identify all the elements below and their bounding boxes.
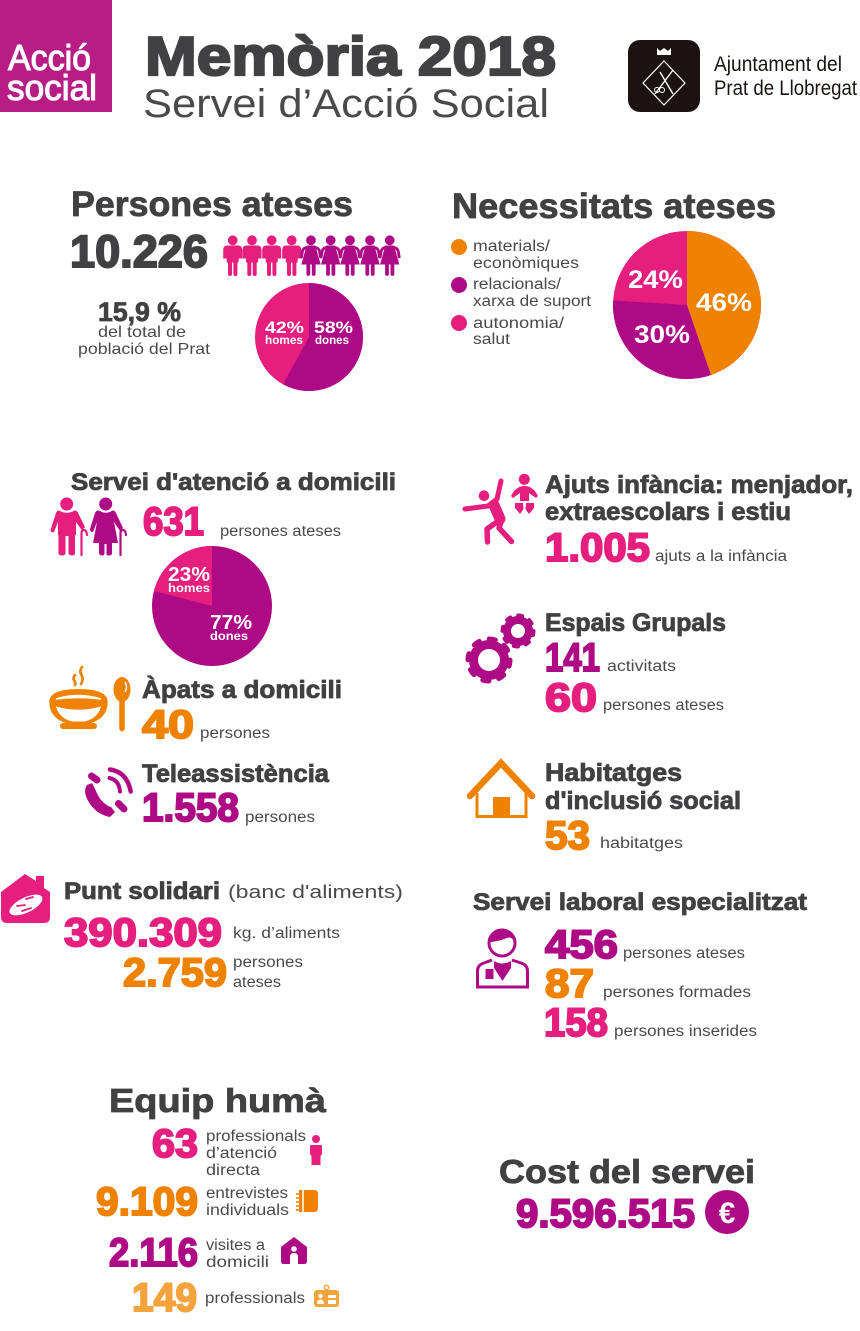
- label: persones: persones: [200, 725, 270, 742]
- icon: euro coin: €: [719, 1197, 736, 1230]
- pie chart: necessitats: 30%: [634, 321, 690, 349]
- icon: person: [310, 1135, 322, 1165]
- pie chart: necessitats: [613, 231, 761, 379]
- legend: salut: [473, 331, 511, 348]
- number: 87: 87: [545, 962, 594, 1006]
- label: visites a domicili: [206, 1237, 269, 1271]
- pie chart: necessitats: 46%: [696, 289, 752, 317]
- label: persones ateses: [233, 954, 303, 991]
- legend: autonomia/: [473, 315, 565, 332]
- label: persones ateses: ateses: [233, 974, 281, 991]
- label: professionals d'atenció directa: [206, 1128, 306, 1179]
- panel: persones ateses: [70, 185, 399, 391]
- heading: Servei laboral especialitzat: [473, 889, 807, 916]
- icon: elderly couple: [50, 498, 126, 556]
- number: 63: 63: [152, 1122, 198, 1166]
- icon: row of people: [224, 236, 399, 274]
- label: persones ateses: persones ateses: [220, 523, 341, 540]
- icon: house with bread: [1, 874, 50, 923]
- label: persones ateses: persones ateses: [603, 697, 724, 714]
- icon: euro coin: [705, 1190, 749, 1234]
- icon: worker: [478, 930, 528, 987]
- legend: relacionals/: [473, 276, 562, 293]
- number: 1.005: 1.005: [545, 526, 650, 570]
- heading: Habitatges: [545, 759, 682, 787]
- number: 456: 456: [545, 923, 618, 967]
- number: 9.109: 9.109: [96, 1180, 198, 1224]
- legend: materials/: [473, 238, 551, 255]
- number: 53: 53: [545, 814, 590, 858]
- number: 149: 149: [132, 1276, 197, 1320]
- label: professionals d'atenció directa: professionals: [206, 1128, 306, 1145]
- number: 9.596.515: 9.596.515: [516, 1192, 695, 1236]
- pie chart: homes dones: 77%: [210, 612, 252, 634]
- number: 141: 141: [545, 636, 600, 680]
- heading: Espais Grupals: [545, 609, 726, 637]
- pie chart: homes dones: 23%: [168, 564, 210, 586]
- label: persones formades: persones formades: [603, 984, 751, 1001]
- pie chart: homes dones: [152, 546, 272, 666]
- heading: Àpats a domicili: [142, 675, 342, 704]
- label: persones inserides: persones inserides: [614, 1023, 757, 1040]
- number: 390.309: 390.309: [64, 911, 222, 955]
- logo: Ajuntament del Prat de Llobregat: [628, 40, 857, 112]
- subtitle: Servei d’Acció Social: [143, 82, 549, 126]
- pie chart: homes dones: 58%: [314, 318, 353, 337]
- number: 158: 158: [544, 1001, 608, 1045]
- label: activitats: activitats: [607, 658, 676, 675]
- number: 2.116: 2.116: [109, 1231, 198, 1275]
- number: 631: 631: [143, 500, 204, 544]
- heading: Teleassistència: [142, 760, 330, 788]
- icon: gears: [468, 616, 534, 681]
- pie chart: homes dones: dones: [210, 629, 248, 643]
- panel: espais grupals: [468, 609, 726, 720]
- label: ajuts a la infància: ajuts a la infància: [655, 548, 787, 565]
- label: persones ateses: persones ateses: [623, 945, 745, 962]
- badge: Acció social: Acció: [8, 37, 91, 78]
- legend: econòmiques: [473, 255, 579, 272]
- icon: notebook: [296, 1190, 318, 1212]
- label: professionals d'atenció directa: d’atenció: [206, 1145, 277, 1162]
- heading: Servei d'atenció a domicili: [71, 469, 396, 496]
- label: entrevistes individuals: individuals: [206, 1202, 289, 1219]
- logo: Ajuntament del Prat de Llobregat: Ajuntament del: [714, 53, 842, 76]
- icon: child and baby: [465, 474, 538, 542]
- badge: Acció social: [0, 0, 112, 112]
- label: entrevistes individuals: [206, 1185, 289, 1219]
- pie chart: homes dones: homes: [168, 581, 210, 595]
- label: visites a domicili: domicili: [206, 1254, 269, 1271]
- icon: bowl and spoon: [49, 667, 130, 729]
- panel: servei laboral especialitzat: [473, 889, 807, 1045]
- number: 1.558: 1.558: [142, 786, 239, 830]
- icon: id badge: [314, 1285, 339, 1307]
- heading: [545, 471, 853, 526]
- heading: Punt solidari: [64, 878, 220, 905]
- heading: Ajuts infància: menjador,: [545, 471, 853, 499]
- icon: phone: [85, 770, 131, 817]
- label: professionals d'atenció directa: directa: [206, 1162, 260, 1179]
- pie chart: homes dones: 42%: [265, 318, 304, 337]
- pie chart: homes dones: homes: [265, 335, 303, 347]
- panel: punt solidari: [1, 874, 403, 995]
- text: 15,9 % of population: 15,9 %: [98, 297, 181, 327]
- legend: [451, 238, 592, 348]
- label: persones: persones: [245, 809, 315, 826]
- icon: house: [470, 763, 532, 817]
- panel: àpats a domicili: [49, 667, 342, 747]
- label: entrevistes individuals: entrevistes: [206, 1185, 288, 1202]
- title: Memòria 2018: [145, 25, 556, 87]
- pie chart: homes dones: dones: [315, 335, 349, 347]
- panel: habitatges: [470, 759, 741, 858]
- number: 10.226: 10.226: [70, 226, 208, 277]
- text: 15,9 % of population: del total de: [98, 324, 186, 341]
- heading: extraescolars i estiu: [545, 498, 791, 526]
- badge: Acció social: social: [7, 67, 97, 108]
- pie chart: necessitats: 24%: [628, 266, 683, 294]
- panel: ajuts infància: [465, 471, 853, 570]
- number: 40: 40: [142, 703, 194, 747]
- heading: Equip humà: [109, 1082, 327, 1119]
- icon: home with person: [281, 1237, 307, 1264]
- label: professionals: professionals: [205, 1290, 305, 1307]
- heading: necessitats ateses: Necessitats ateses: [452, 187, 776, 226]
- number: 60: 60: [545, 676, 597, 720]
- panel: servei d'atenció a domicili: [50, 469, 396, 666]
- heading: persones ateses: Persones ateses: [71, 185, 353, 224]
- legend: xarxa de suport: [473, 293, 592, 310]
- panel: equip humà: [96, 1082, 339, 1320]
- label: habitatges: habitatges: [600, 835, 683, 852]
- panel: teleassistència: [85, 760, 330, 830]
- panel: cost del servei: [499, 1153, 755, 1236]
- pie chart: homes dones: [255, 283, 363, 391]
- label: visites a domicili: visites a: [206, 1237, 265, 1254]
- panel: necessitats ateses: [451, 187, 776, 379]
- text: 15,9 % of population: [78, 297, 211, 358]
- text: 15,9 % of population: població del Prat: [78, 341, 211, 358]
- heading: [545, 759, 741, 815]
- subheading: (banc d'aliments): [228, 881, 403, 902]
- label: persones ateses: persones: [233, 954, 303, 971]
- heading: d'inclusió social: [545, 787, 741, 815]
- number: 2.759: 2.759: [123, 951, 227, 995]
- label: kg. d'aliments: kg. d’aliments: [233, 925, 340, 942]
- heading: Cost del servei: [499, 1153, 755, 1190]
